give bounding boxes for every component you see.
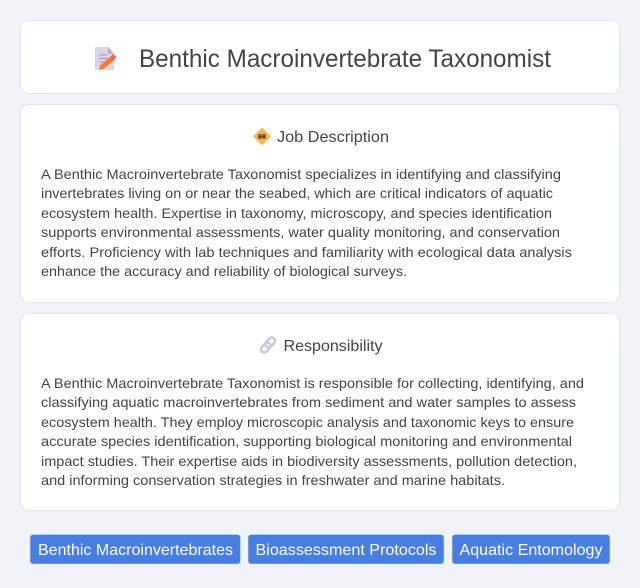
tag: Aquatic Entomology: Aquatic Entomology <box>460 542 602 559</box>
panel: job description <box>20 104 620 302</box>
panel: title card <box>20 20 620 94</box>
text block: job description: enhance the accuracy and reliability of biological surveys. <box>41 263 407 279</box>
heading: job description: Job Description <box>277 129 389 146</box>
heading: responsibility: Responsibility <box>284 338 382 355</box>
text block: job description: A Benthic Macroinvertebrate Taxonomist specializes in identifying and classifying <box>41 166 561 182</box>
text block: responsibility: A Benthic Macroinvertebrate Taxonomist is responsible for collecting, identifying, and <box>41 375 584 391</box>
icon: chain link <box>260 336 276 354</box>
icon: orange diamond sign <box>254 128 270 144</box>
tag: Bioassessment Protocols <box>248 534 444 564</box>
text block: responsibility: and informing conservation strategies in freshwater and marine habitats. <box>41 472 505 488</box>
panel: responsibility <box>20 314 620 510</box>
text block: responsibility: impact studies. Their expertise aids in biodiversity assessments, pollution detection, <box>41 453 577 469</box>
text block: responsibility <box>41 375 584 488</box>
text block: job description: efforts. Proficiency with lab techniques and familiarity with ecological data analysis <box>41 244 572 260</box>
tag: Bioassessment Protocols: Bioassessment Protocols <box>256 542 436 559</box>
text block: responsibility: classifying aquatic macroinvertebrates from sediment and water samples to assess <box>41 394 576 410</box>
text block: job description: invertebrates living on or near the seabed, which are critical indicators of aquatic <box>41 185 553 201</box>
text block: job description: supports environmental assessments, water quality monitoring, and conservation <box>41 224 560 240</box>
text block: responsibility: ecosystem health. They employ microscopic analysis and taxonomic keys to ensure <box>41 414 574 430</box>
text block: job description: ecosystem health. Expertise in taxonomy, microscopy, and species identification <box>41 205 552 221</box>
text block: responsibility: accurate species identification, supporting biological monitoring and environmental <box>41 433 572 449</box>
tag: Benthic Macroinvertebrates: Benthic Macroinvertebrates <box>38 542 233 559</box>
tag: Aquatic Entomology <box>452 534 610 564</box>
title: Benthic Macroinvertebrate Taxonomist <box>139 45 551 73</box>
text block: job description <box>41 166 572 279</box>
icon: document with pencil <box>95 47 116 70</box>
tag: Benthic Macroinvertebrates <box>30 534 240 564</box>
